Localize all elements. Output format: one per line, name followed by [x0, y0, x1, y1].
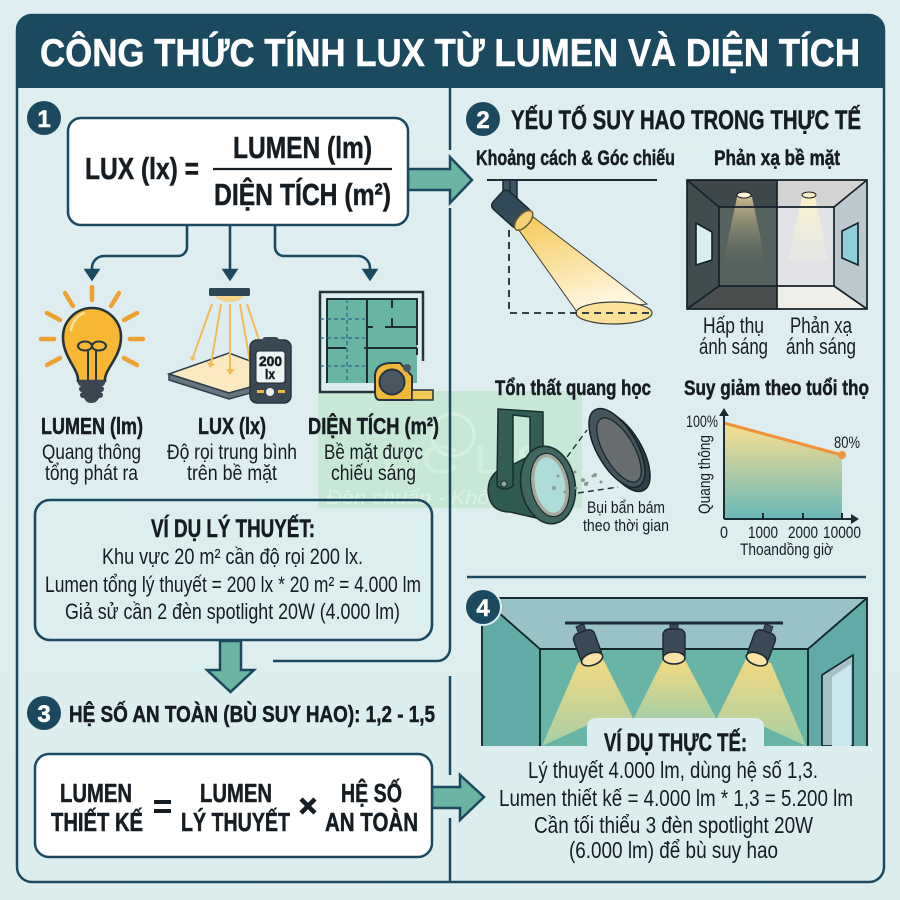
- track spotlight left: [569, 622, 605, 668]
- label: lumen: Quang thông: [42, 441, 141, 464]
- panel: lumen depreciation chart: 80%: [834, 433, 860, 452]
- icon: lux meter on surface: lx: [265, 366, 275, 382]
- design lumen formula box: THIẾT KẾ: [51, 807, 143, 837]
- panel: optical loss: Tổn thất quang học: [495, 377, 651, 400]
- design lumen formula box: AN TOÀN: [325, 807, 418, 837]
- panel: lumen depreciation chart: Quang thông: [695, 435, 714, 514]
- icon: floor plan and tape measure: [320, 292, 433, 400]
- formula box: LUX (lx) =: [85, 151, 199, 186]
- design lumen formula box: LUMEN: [200, 778, 272, 808]
- theoretical example box: Khu vực 20 m² cần độ rọi 200 lx.: [102, 544, 363, 569]
- arrow: step 3 to step 4: [432, 775, 484, 820]
- real example text: (6.000 lm) để bù suy hao: [569, 837, 778, 863]
- label: lux: [167, 413, 297, 485]
- label: area: Bề mặt được: [324, 441, 423, 464]
- track spotlight centre: [663, 624, 685, 664]
- panel dividers: [273, 88, 450, 883]
- label: area: [308, 412, 439, 485]
- panel: surface reflection: [687, 147, 867, 359]
- track spotlight right: [744, 622, 780, 668]
- watermark: LiC LiS: [380, 438, 550, 482]
- theoretical example box: Giả sử cần 2 đèn spotlight 20W (4.000 lm): [65, 599, 400, 624]
- panel: surface reflection: Hấp thụ: [703, 313, 764, 338]
- formula box: DIỆN TÍCH (m²): [214, 176, 391, 212]
- panel: lumen depreciation chart: 10000: [823, 523, 861, 542]
- design lumen formula box: LUMEN: [60, 778, 132, 808]
- step 3 heading: HỆ SỐ AN TOÀN (BÙ SUY HAO): 1,2 - 1,5: [69, 700, 435, 727]
- label: area: DIỆN TÍCH (m²): [308, 412, 439, 439]
- panel: distance and beam angle: [476, 147, 675, 324]
- theoretical example box: [35, 500, 432, 640]
- design lumen formula box: HỆ SỐ: [341, 778, 402, 808]
- real example text: Lý thuyết 4.000 lm, dùng hệ số 1,3.: [528, 757, 818, 783]
- label: lux: trên bề mặt: [187, 462, 277, 485]
- label: area: chiếu sáng: [331, 462, 416, 485]
- real example text: [481, 718, 868, 863]
- panel: surface reflection: Phản xạ: [790, 313, 853, 338]
- step 3 heading: 3: [37, 701, 51, 728]
- panel: lumen depreciation chart: 0: [720, 523, 728, 542]
- arrow: example to step 3: [207, 641, 254, 692]
- real example text: Cần tối thiểu 3 đèn spotlight 20W: [534, 812, 813, 838]
- design lumen formula box: LÝ THUYẾT: [181, 807, 290, 837]
- panel: optical loss: Bụi bẩn bám: [587, 498, 665, 517]
- step 1 badge: 1: [37, 106, 51, 133]
- step 4 badge: 4: [476, 595, 490, 622]
- panel: optical loss: [488, 377, 669, 535]
- label: lumen: [41, 413, 143, 485]
- step 3 heading: [27, 696, 435, 730]
- label: lumen: tổng phát ra: [45, 462, 138, 485]
- label: lux: LUX (lx): [198, 413, 266, 439]
- icon: lux meter on surface: [169, 288, 291, 403]
- panel: optical loss: theo thời gian: [583, 516, 669, 535]
- icon: lux meter on surface: 200: [259, 353, 282, 369]
- panel: distance and beam angle: Khoảng cách & Góc chiếu: [476, 147, 675, 170]
- panel: lumen depreciation chart: 100%: [686, 412, 718, 431]
- theoretical example box: Lumen tổng lý thuyết = 200 lx * 20 m² = 4.000 lm: [45, 572, 421, 597]
- step 4 badge: [464, 588, 502, 626]
- panel: lumen depreciation chart: 2000: [788, 523, 818, 542]
- watermark: [318, 391, 582, 509]
- theoretical example box: VÍ DỤ LÝ THUYẾT:: [151, 513, 315, 543]
- design lumen formula box: [35, 754, 432, 857]
- panel: surface reflection: ánh sáng: [786, 334, 856, 359]
- panel: real example room: [482, 598, 867, 746]
- branch arrows: [86, 225, 376, 279]
- icon: light bulb: [41, 287, 143, 403]
- title bar: [16, 14, 885, 88]
- step 2 heading: 2: [476, 107, 490, 134]
- panel: surface reflection: ánh sáng: [699, 334, 768, 359]
- real example text: VÍ DỤ THỰC TẾ:: [604, 728, 747, 757]
- formula box: LUMEN (lm): [233, 130, 372, 165]
- label: lux: Độ rọi trung bình: [167, 441, 297, 464]
- panel: lumen depreciation chart: Thoandồng giờ: [740, 540, 833, 559]
- watermark: Đèn chuẩn - Không gian: [326, 488, 561, 509]
- label: lumen: LUMEN (lm): [41, 413, 143, 439]
- panel: surface reflection: Phản xạ bề mặt: [714, 147, 840, 170]
- formula box: [68, 118, 408, 225]
- panel: lumen depreciation chart: [684, 377, 869, 559]
- panel: lumen depreciation chart: 1000: [748, 523, 778, 542]
- arrow: formula to section 2: [408, 157, 472, 203]
- step 1 badge: [27, 101, 61, 135]
